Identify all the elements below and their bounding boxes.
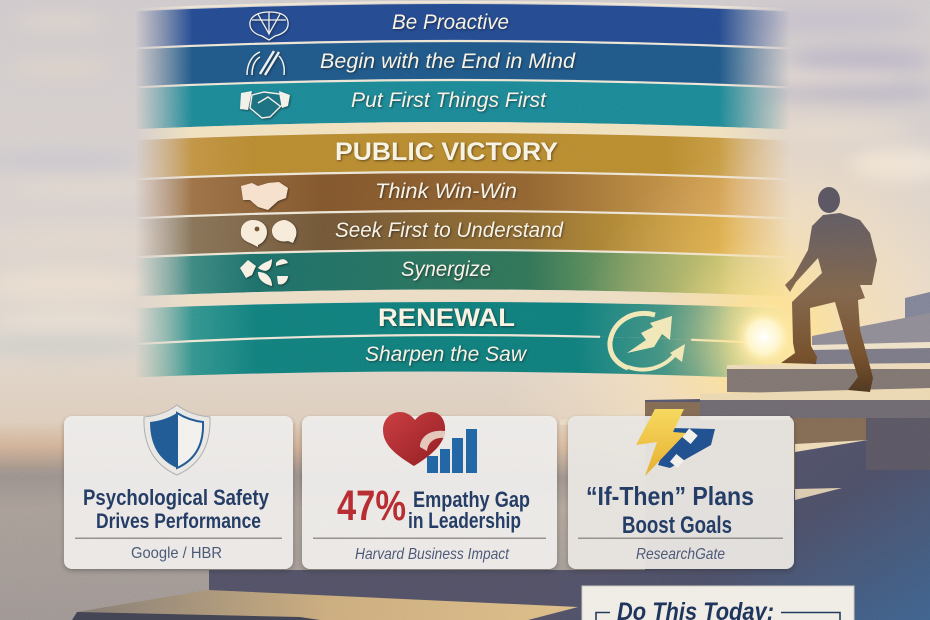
icon: lightning bolt bbox=[636, 409, 686, 476]
subheading: in Leadership bbox=[408, 508, 521, 533]
band: Think Win-Win bbox=[138, 173, 785, 217]
source: ResearchGate bbox=[636, 546, 725, 563]
card: psychological safety bbox=[64, 405, 293, 569]
band: Synergize bbox=[120, 250, 800, 297]
icon: bar chart bbox=[427, 429, 477, 473]
subheading: Drives Performance bbox=[96, 510, 261, 533]
heading: Empathy Gap bbox=[413, 487, 530, 512]
sunlight glow bbox=[575, 148, 930, 528]
text: Think Win-Win: Think Win-Win bbox=[375, 180, 517, 203]
icon: handshake outline bbox=[240, 91, 290, 118]
band: Be Proactive bbox=[120, 4, 800, 49]
band: Sharpen the Saw bbox=[138, 336, 766, 377]
source: Harvard Business Impact bbox=[355, 546, 509, 563]
text: Seek First to Understand: Seek First to Understand bbox=[335, 219, 564, 242]
icon: shield bbox=[144, 405, 210, 475]
heading: Psychological Safety bbox=[83, 485, 270, 510]
text: Sharpen the Saw: Sharpen the Saw bbox=[365, 343, 528, 366]
text: Synergize: Synergize bbox=[401, 258, 491, 281]
band: Begin with the End in Mind bbox=[138, 42, 787, 86]
divider: second cream strip bbox=[149, 290, 729, 306]
subheading: Boost Goals bbox=[622, 512, 732, 539]
icon: heart bbox=[383, 412, 445, 466]
text: Be Proactive: Be Proactive bbox=[392, 11, 509, 34]
band: Public Victory bbox=[120, 133, 800, 180]
band labels bbox=[240, 11, 576, 366]
source: Google / HBR bbox=[131, 545, 222, 562]
heading: Renewal: RENEWAL bbox=[378, 304, 515, 332]
band: Seek First to Understand bbox=[140, 212, 785, 256]
icon: synergy pieces bbox=[240, 259, 288, 286]
figure: man climbing stairs bbox=[781, 187, 877, 392]
icon: speech bubbles bbox=[241, 220, 296, 247]
card: empathy gap bbox=[302, 412, 557, 569]
stat: 47%: 47% bbox=[337, 482, 406, 530]
panel: habit bands bbox=[120, 2, 800, 380]
background: staircase bbox=[72, 292, 930, 620]
callout: do this today bbox=[582, 586, 854, 620]
icon: renewal cycle bbox=[610, 313, 685, 370]
sun bbox=[734, 307, 794, 367]
icon: brain globe bbox=[250, 12, 288, 40]
icon: solid handshake bbox=[241, 182, 288, 210]
icon: blue arrow bbox=[658, 428, 715, 468]
band: Put First Things First bbox=[120, 80, 800, 130]
icon: road arcs bbox=[247, 51, 284, 75]
text: Begin with the End in Mind: Begin with the End in Mind bbox=[320, 50, 576, 73]
divider: cream strip bbox=[144, 122, 774, 139]
text: Put First Things First: Put First Things First bbox=[351, 89, 547, 112]
heading: “If-Then” Plans bbox=[586, 481, 754, 511]
card: if-then plans bbox=[568, 409, 794, 569]
heading: Public Victory: PUBLIC VICTORY bbox=[335, 138, 558, 166]
band: Renewal bbox=[138, 302, 773, 342]
